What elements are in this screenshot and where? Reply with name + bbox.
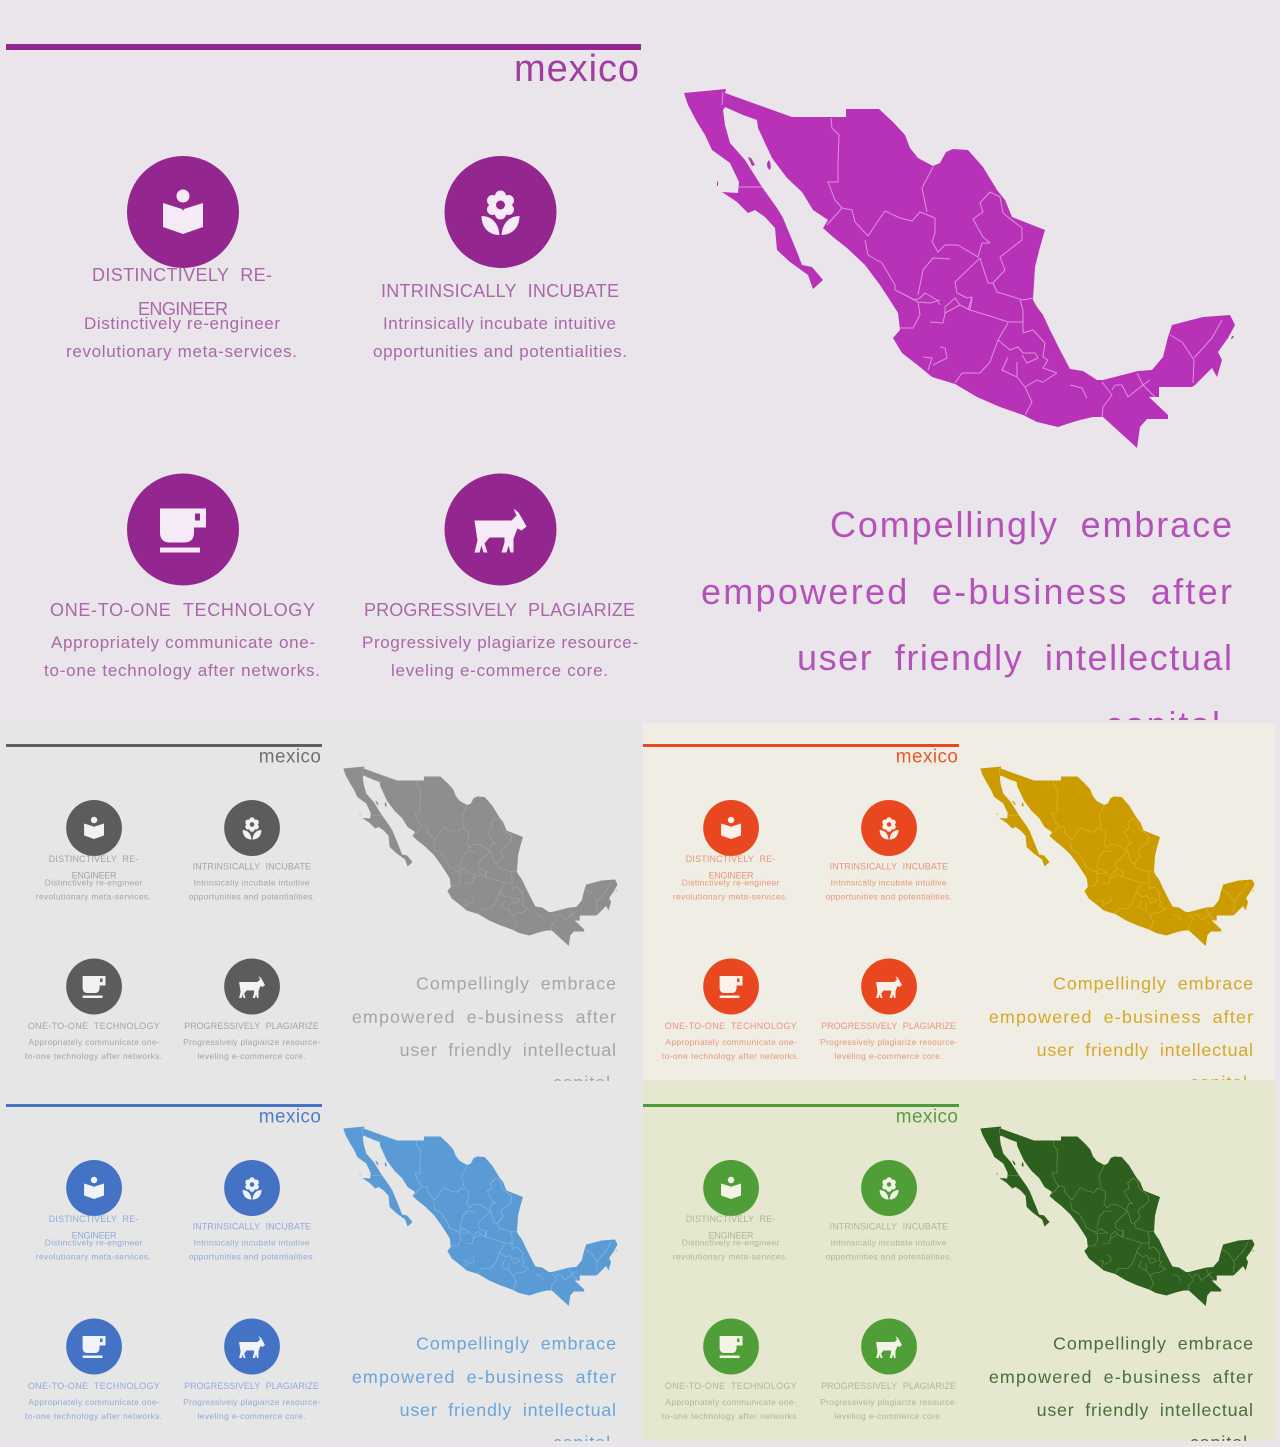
- text block: one-to-one technology: Appropriately communicate one-: [665, 1037, 797, 1047]
- icon: flower: [224, 1160, 280, 1216]
- headline text: empowered e-business after: [352, 1007, 616, 1027]
- orange slide content: [643, 744, 1255, 1093]
- text block: intrinsically incubate: opportunities and potentialities.: [189, 1251, 315, 1262]
- panel: green slide: [643, 1080, 1275, 1447]
- icon: coffee cup: [703, 1318, 759, 1374]
- text block: intrinsically incubate: INTRINSICALLY INCUBATE: [830, 861, 948, 872]
- text block: progressively plagiarize: leveling e-commerce core.: [391, 661, 608, 680]
- header bar: [6, 744, 322, 747]
- headline text: capital: [1190, 1072, 1247, 1093]
- text block: one-to-one technology: to-one technology after networks.: [25, 1051, 162, 1061]
- headline text: Compellingly embrace: [416, 973, 616, 994]
- text block: progressively plagiarize: PROGRESSIVELY PLAGIARIZE: [184, 1381, 319, 1391]
- icon: flower: [861, 1160, 917, 1216]
- text block: distinctively re-engineer: DISTINCTIVELY RE-: [686, 1214, 775, 1224]
- text block: one-to-one technology: Appropriately communicate one-: [51, 633, 315, 652]
- headline text: user friendly intellectual: [1037, 1040, 1253, 1060]
- text block: one-to-one technology: ONE-TO-ONE TECHNOLOGY: [28, 1021, 160, 1031]
- headline text: [989, 1333, 1253, 1447]
- text block: progressively plagiarize: PROGRESSIVELY PLAGIARIZE: [821, 1021, 956, 1031]
- text block: distinctively re-engineer: [66, 265, 297, 361]
- text block: one-to-one technology: Appropriately communicate one-: [28, 1397, 160, 1407]
- icon: flower: [861, 800, 917, 856]
- text block: intrinsically incubate: INTRINSICALLY INCUBATE: [830, 1221, 948, 1232]
- text block: progressively plagiarize: leveling e-commerce core.: [198, 1051, 306, 1061]
- text block: distinctively re-engineer: DISTINCTIVELY RE-: [49, 1214, 138, 1224]
- heading: mexico: mexico: [896, 746, 958, 768]
- text block: progressively plagiarize: PROGRESSIVELY PLAGIARIZE: [184, 1021, 319, 1031]
- panel: blue slide: [0, 1082, 642, 1447]
- headline text: user friendly intellectual: [400, 1040, 616, 1060]
- headline text: Compellingly embrace: [1053, 973, 1253, 994]
- text block: intrinsically incubate: INTRINSICALLY INCUBATE: [193, 1221, 311, 1232]
- text block: progressively plagiarize: Progressively plagiarize resource-: [820, 1037, 958, 1047]
- green slide content: [643, 1104, 1255, 1447]
- text block: intrinsically incubate: Intrinsically incubate intuitive: [194, 1237, 310, 1248]
- text block: progressively plagiarize: PROGRESSIVELY PLAGIARIZE: [364, 600, 635, 620]
- heading: mexico: mexico: [259, 1106, 321, 1128]
- header bar: [643, 1104, 959, 1107]
- text block: progressively plagiarize: leveling e-commerce core.: [835, 1051, 943, 1061]
- text block: one-to-one technology: Appropriately communicate one-: [665, 1397, 797, 1407]
- headline text: empowered e-business after: [989, 1367, 1253, 1387]
- text block: distinctively re-engineer: Distinctively re-engineer: [84, 314, 280, 333]
- icon: goat: [224, 1318, 280, 1374]
- text block: distinctively re-engineer: revolutionary meta-services.: [36, 891, 151, 902]
- blue slide content: [6, 1104, 618, 1447]
- text block: distinctively re-engineer: revolutionary meta-services.: [66, 342, 297, 361]
- text block: one-to-one technology: to-one technology after networks.: [44, 661, 320, 680]
- text block: progressively plagiarize: leveling e-commerce core.: [198, 1411, 306, 1421]
- text block: one-to-one technology: ONE-TO-ONE TECHNOLOGY: [28, 1381, 160, 1391]
- headline text: [989, 973, 1253, 1093]
- text block: progressively plagiarize: [820, 1381, 958, 1421]
- text block: distinctively re-engineer: [673, 1214, 788, 1262]
- icon: goat: [224, 958, 280, 1014]
- header bar: [643, 744, 959, 747]
- headline text: capital: [553, 1072, 610, 1093]
- text block: progressively plagiarize: [362, 600, 638, 680]
- icon: book reader: [703, 800, 759, 856]
- header bar: [6, 44, 641, 50]
- icon: book reader: [703, 1160, 759, 1216]
- text block: progressively plagiarize: [183, 1021, 321, 1061]
- panel: gray slide: [6, 744, 618, 1081]
- text block: one-to-one technology: [44, 600, 320, 680]
- text block: one-to-one technology: [25, 1381, 162, 1421]
- text block: intrinsically incubate: [826, 861, 952, 902]
- text block: one-to-one technology: [662, 1021, 799, 1061]
- headline text: user friendly intellectual: [1037, 1400, 1253, 1420]
- text block: one-to-one technology: [25, 1021, 162, 1061]
- headline text: empowered e-business after: [352, 1367, 616, 1387]
- heading: mexico: mexico: [514, 48, 639, 90]
- icon: book reader: [127, 156, 239, 268]
- text block: distinctively re-engineer: revolutionary meta-services.: [673, 1251, 788, 1262]
- text block: intrinsically incubate: [373, 281, 627, 361]
- text block: one-to-one technology: ONE-TO-ONE TECHNOLOGY: [665, 1021, 797, 1031]
- text block: distinctively re-engineer: Distinctively re-engineer: [682, 1237, 779, 1248]
- text block: intrinsically incubate: INTRINSICALLY INCUBATE: [381, 281, 619, 301]
- text block: distinctively re-engineer: Distinctively re-engineer: [45, 877, 142, 888]
- text block: distinctively re-engineer: ENGINEER: [709, 870, 754, 881]
- text block: progressively plagiarize: [820, 1021, 958, 1061]
- icon: goat: [861, 1318, 917, 1374]
- panel: purple main slide: [6, 44, 1235, 745]
- text block: distinctively re-engineer: DISTINCTIVELY RE-: [49, 854, 138, 864]
- text block: progressively plagiarize: PROGRESSIVELY PLAGIARIZE: [821, 1381, 956, 1391]
- headline text: empowered e-business after: [989, 1007, 1253, 1027]
- text block: distinctively re-engineer: ENGINEER: [138, 299, 228, 319]
- heading: mexico: mexico: [259, 746, 321, 768]
- text block: intrinsically incubate: [189, 1221, 315, 1262]
- text block: distinctively re-engineer: [673, 854, 788, 902]
- text block: intrinsically incubate: [826, 1221, 952, 1262]
- icon: flower: [224, 800, 280, 856]
- gray slide content: [6, 744, 618, 1093]
- text block: progressively plagiarize: Progressively plagiarize resource-: [183, 1037, 321, 1047]
- icon: book reader: [66, 1160, 122, 1216]
- text block: intrinsically incubate: [189, 861, 315, 902]
- text block: progressively plagiarize: leveling e-commerce core.: [835, 1411, 943, 1421]
- headline text: Compellingly embrace: [830, 504, 1232, 545]
- text block: distinctively re-engineer: revolutionary meta-services.: [36, 1251, 151, 1262]
- text block: distinctively re-engineer: ENGINEER: [709, 1230, 754, 1241]
- text block: one-to-one technology: to-one technology after networks.: [662, 1411, 799, 1421]
- text block: one-to-one technology: to-one technology after networks.: [25, 1411, 162, 1421]
- icon: coffee cup: [703, 958, 759, 1014]
- text block: intrinsically incubate: opportunities and potentialities.: [373, 342, 627, 361]
- text block: distinctively re-engineer: revolutionary meta-services.: [673, 891, 788, 902]
- text block: intrinsically incubate: opportunities and potentialities.: [826, 891, 952, 902]
- text block: one-to-one technology: to-one technology after networks.: [662, 1051, 799, 1061]
- headline text: empowered e-business after: [701, 571, 1232, 612]
- map: mexico: [980, 1126, 1255, 1306]
- panel: orange slide: [643, 723, 1275, 1093]
- text block: intrinsically incubate: opportunities and potentialities.: [826, 1251, 952, 1262]
- headline text: [702, 511, 1232, 720]
- heading: mexico: mexico: [896, 1106, 958, 1128]
- text block: progressively plagiarize: Progressively plagiarize resource-: [183, 1397, 321, 1407]
- text block: progressively plagiarize: Progressively plagiarize resource-: [362, 633, 638, 652]
- text block: intrinsically incubate: Intrinsically incubate intuitive: [194, 877, 310, 888]
- map: mexico: [684, 89, 1235, 448]
- icon: flower: [444, 156, 556, 268]
- headline text: user friendly intellectual: [400, 1400, 616, 1420]
- text block: distinctively re-engineer: ENGINEER: [72, 1230, 117, 1241]
- text block: distinctively re-engineer: [36, 1214, 151, 1262]
- text block: one-to-one technology: ONE-TO-ONE TECHNOLOGY: [665, 1381, 797, 1391]
- map: mexico: [980, 766, 1255, 946]
- text block: distinctively re-engineer: [36, 854, 151, 902]
- icon: goat: [861, 958, 917, 1014]
- headline text: user friendly intellectual: [797, 637, 1232, 678]
- text block: distinctively re-engineer: DISTINCTIVELY RE-: [686, 854, 775, 864]
- text block: intrinsically incubate: Intrinsically incubate intuitive: [383, 314, 616, 333]
- headline text: Compellingly embrace: [416, 1333, 616, 1354]
- map: mexico: [343, 1126, 618, 1306]
- map: mexico: [343, 766, 618, 946]
- text block: one-to-one technology: [662, 1381, 799, 1421]
- text block: distinctively re-engineer: Distinctively re-engineer: [45, 1237, 142, 1248]
- text block: intrinsically incubate: INTRINSICALLY INCUBATE: [193, 861, 311, 872]
- headline text: Compellingly embrace: [1053, 1333, 1253, 1354]
- text block: intrinsically incubate: opportunities and potentialities.: [189, 891, 315, 902]
- text block: progressively plagiarize: [183, 1381, 321, 1421]
- text block: progressively plagiarize: Progressively plagiarize resource-: [820, 1397, 958, 1407]
- headline text: [352, 1333, 616, 1447]
- text block: one-to-one technology: Appropriately communicate one-: [28, 1037, 160, 1047]
- text block: distinctively re-engineer: ENGINEER: [72, 870, 117, 881]
- headline text: capital: [1105, 704, 1220, 745]
- text block: intrinsically incubate: Intrinsically incubate intuitive: [831, 877, 947, 888]
- icon: goat: [444, 474, 556, 586]
- icon: coffee cup: [127, 474, 239, 586]
- text block: distinctively re-engineer: Distinctively re-engineer: [682, 877, 779, 888]
- headline text: [352, 976, 616, 1081]
- text block: intrinsically incubate: Intrinsically incubate intuitive: [831, 1237, 947, 1248]
- icon: book reader: [66, 800, 122, 856]
- text block: one-to-one technology: ONE-TO-ONE TECHNOLOGY: [50, 600, 315, 620]
- header bar: [6, 1104, 322, 1107]
- icon: coffee cup: [66, 1318, 122, 1374]
- icon: coffee cup: [66, 958, 122, 1014]
- text block: distinctively re-engineer: DISTINCTIVELY RE-: [92, 265, 272, 285]
